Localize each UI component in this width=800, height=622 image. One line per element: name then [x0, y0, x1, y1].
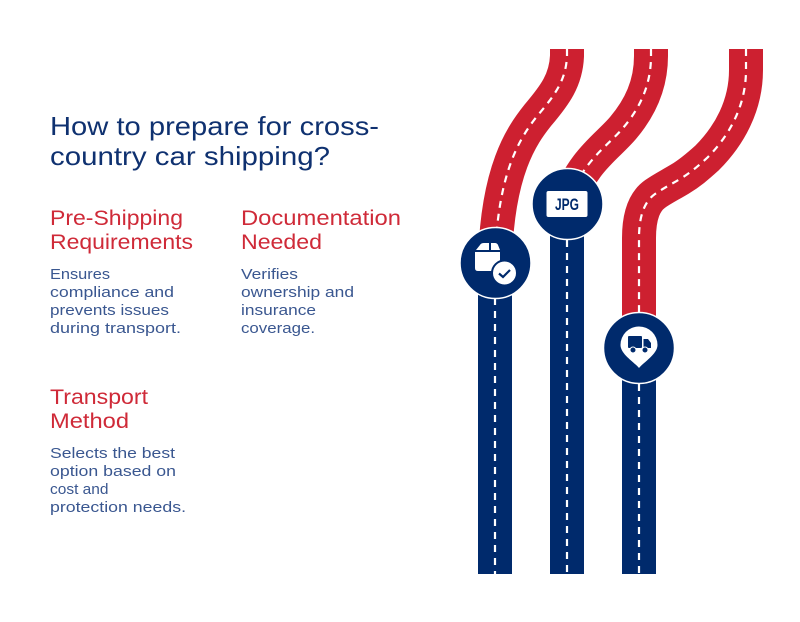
heading: pre-shipping requirements: Requirements [50, 231, 193, 254]
road 1 [495, 49, 567, 574]
heading: documentation needed [241, 207, 401, 254]
title: How to prepare for cross- [50, 111, 379, 141]
heading: transport method: Transport [50, 386, 148, 409]
icon: truck location pin [604, 312, 674, 384]
description: transport method: Selects the best [50, 445, 176, 462]
heading: pre-shipping requirements [50, 207, 193, 254]
description: pre-shipping requirements: Ensures [50, 266, 110, 283]
description: transport method [50, 445, 186, 516]
icon: jpg file: JPG [555, 195, 579, 214]
description: pre-shipping requirements: compliance and [50, 284, 174, 301]
text block: pre-shipping requirements [50, 207, 193, 337]
icon: package with check [460, 228, 531, 298]
heading: transport method: Method [50, 410, 129, 433]
heading: documentation needed: Documentation [241, 207, 401, 230]
heading: documentation needed: Needed [241, 231, 322, 254]
title: country car shipping? [50, 141, 330, 171]
description: documentation needed: insurance [241, 302, 316, 319]
description: pre-shipping requirements: prevents issues [50, 302, 169, 319]
text block: transport method [50, 386, 186, 516]
title [50, 111, 379, 171]
description: transport method: protection needs. [50, 499, 186, 516]
heading: transport method [50, 386, 148, 433]
description: documentation needed: ownership and [241, 284, 354, 301]
description: transport method: cost and [50, 481, 108, 498]
road 3 [639, 49, 746, 574]
icon: jpg file [532, 168, 603, 240]
description: documentation needed: Verifies [241, 266, 298, 283]
description: transport method: option based on [50, 463, 176, 480]
description: pre-shipping requirements [50, 266, 181, 337]
description: pre-shipping requirements: during transport. [50, 320, 181, 337]
text block: documentation needed [241, 207, 401, 337]
heading: pre-shipping requirements: Pre-Shipping [50, 207, 183, 230]
description: documentation needed [241, 266, 354, 337]
road 2 [567, 49, 651, 574]
description: documentation needed: coverage. [241, 320, 315, 337]
